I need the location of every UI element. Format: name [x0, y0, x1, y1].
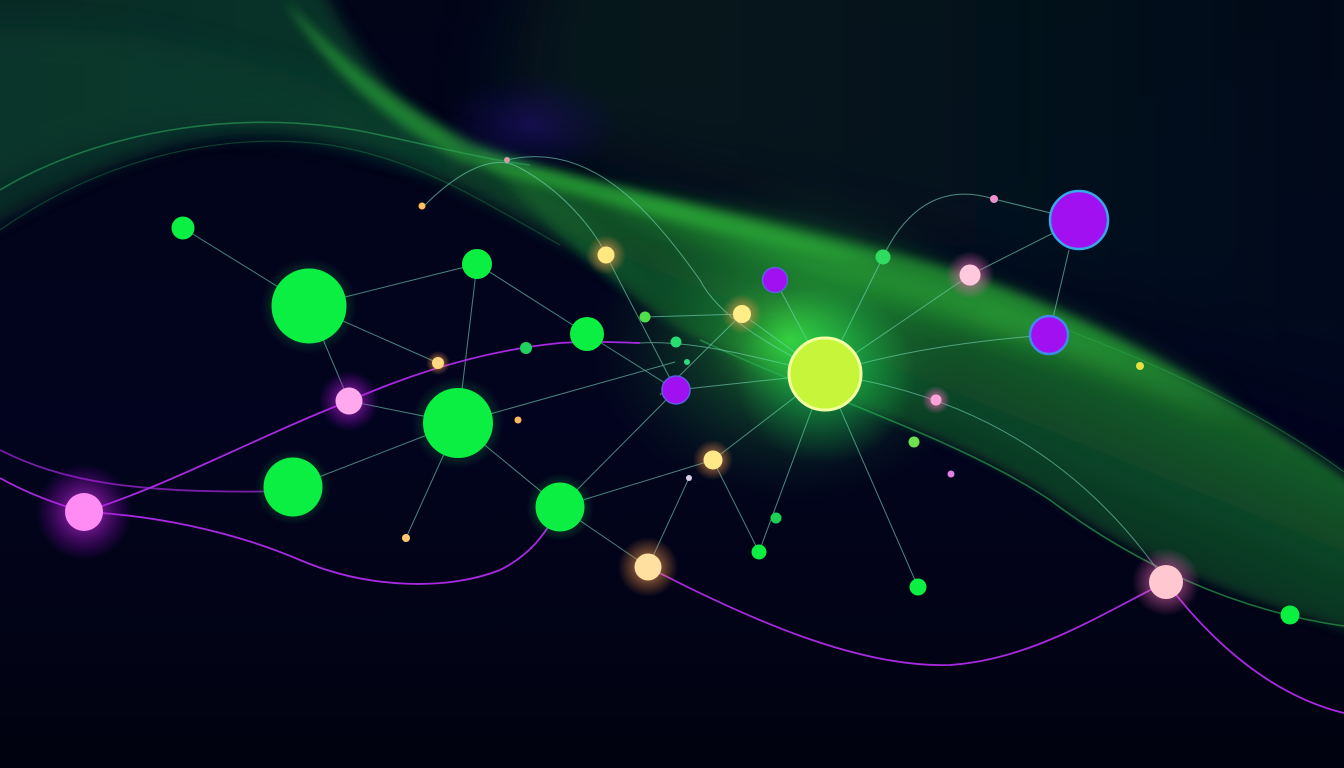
node glows — [36, 235, 1200, 616]
connection lines — [183, 157, 1166, 587]
green nodes — [172, 216, 1300, 624]
purple nodes — [662, 191, 1108, 404]
central hub node — [789, 338, 861, 410]
glowing light nodes — [65, 157, 1183, 599]
ribbon edges — [0, 122, 1344, 626]
magenta curves — [0, 342, 1344, 713]
